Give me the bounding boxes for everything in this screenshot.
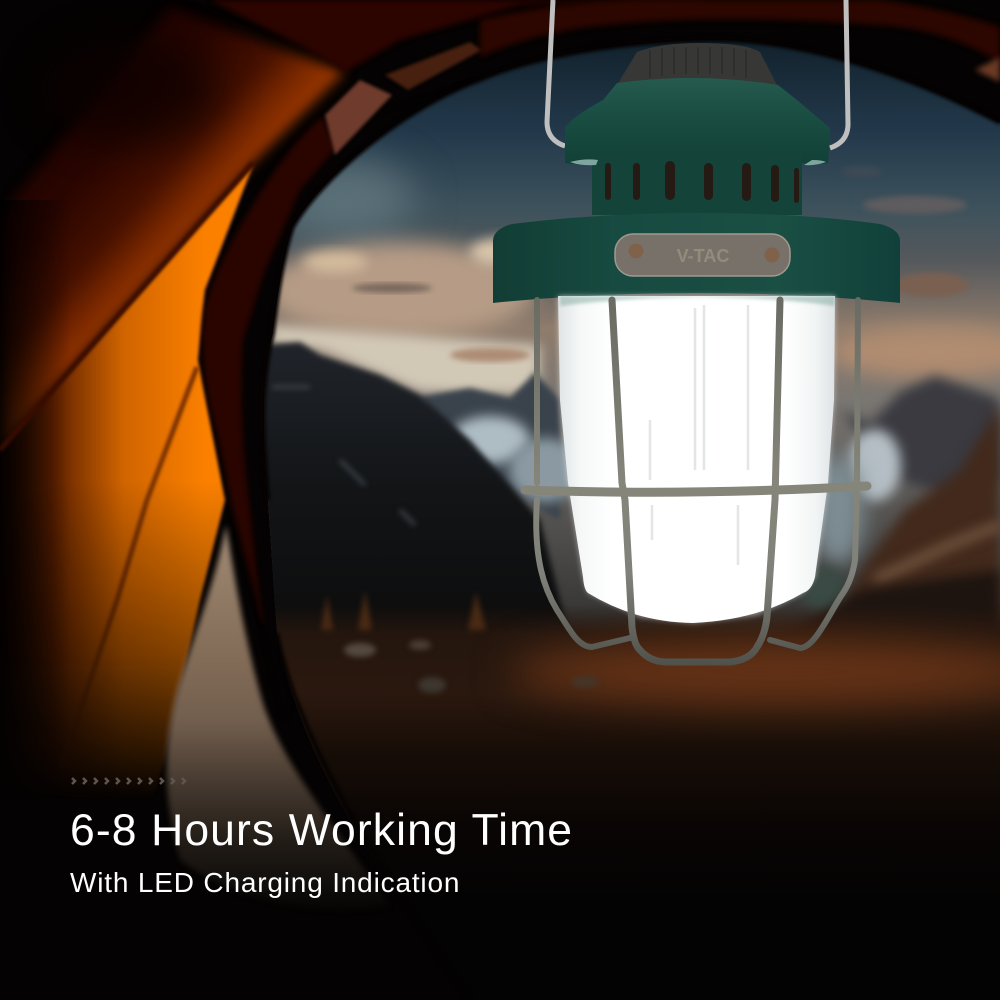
top right tan patch	[975, 57, 1000, 82]
vented neck	[570, 153, 826, 215]
right brown slope	[844, 408, 1000, 600]
lantern	[493, 0, 900, 662]
slope shadow	[812, 567, 1000, 626]
clouds right	[830, 166, 1000, 378]
glowing glass	[558, 296, 835, 623]
dark door flap	[203, 117, 340, 640]
top red band	[480, 0, 1000, 63]
distant trees	[321, 590, 486, 630]
badge	[615, 234, 790, 276]
upper tent panel	[0, 8, 345, 450]
ground rocks	[344, 640, 599, 693]
window black rim	[242, 82, 480, 720]
mountain snow marks	[272, 387, 415, 525]
badge: V-TAC	[677, 246, 729, 266]
tan rim patch right	[385, 42, 482, 90]
right mountain peak	[840, 376, 1000, 500]
sky glow left	[275, 160, 415, 240]
decorative chevrons	[72, 778, 185, 784]
top knob	[617, 43, 778, 87]
window edge shadow	[264, 40, 1000, 1000]
glowing orange fabric	[0, 165, 253, 840]
distant mountain and mist	[420, 372, 581, 520]
mountain view through tent window	[264, 40, 1000, 810]
sunlit ground	[510, 638, 1000, 706]
tan rim patch left	[325, 80, 392, 155]
green top cap	[565, 78, 830, 164]
panel top shadow	[40, 35, 220, 145]
top rim fabric	[210, 0, 620, 72]
slope highlight	[875, 525, 1000, 580]
wire handle	[547, 0, 848, 148]
metal cage	[525, 300, 867, 662]
beige daylight wedge	[167, 525, 390, 910]
right mountain mist	[803, 429, 901, 614]
left dark mountain	[262, 342, 570, 640]
subheading: With LED Charging Indication	[70, 867, 460, 898]
tent seam	[0, 163, 253, 450]
valley floor	[276, 611, 1000, 810]
green band	[493, 213, 900, 303]
heading: 6-8 Hours Working Time	[70, 806, 573, 855]
clouds left	[265, 238, 540, 395]
